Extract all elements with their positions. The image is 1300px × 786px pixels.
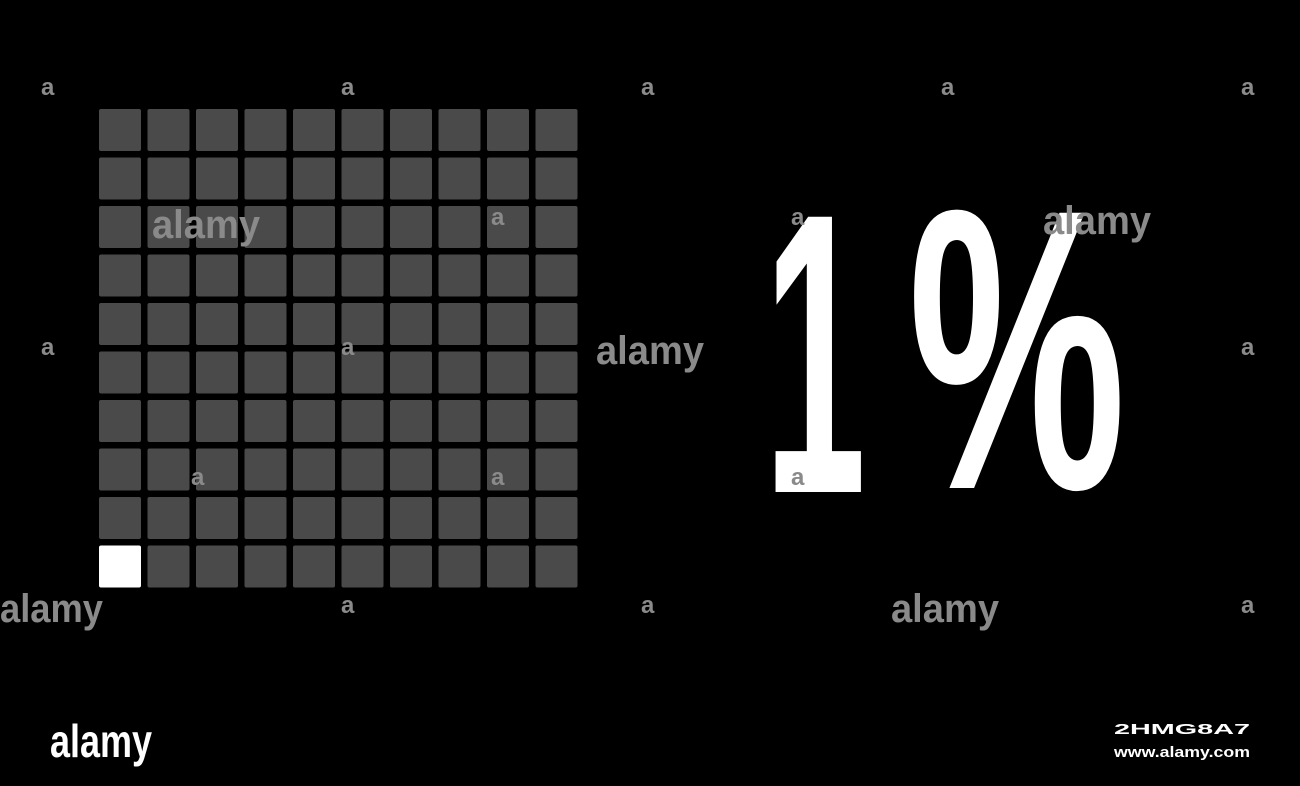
footer image id: www.alamy.com (1113, 744, 1250, 761)
watermarks: alamy (1043, 199, 1152, 243)
small watermark marks: a (641, 592, 655, 619)
small watermark marks: a (341, 592, 355, 619)
small watermark marks (41, 74, 1255, 619)
small watermark marks: a (41, 74, 55, 101)
small watermark marks: a (191, 464, 205, 491)
small watermark marks: a (341, 334, 355, 361)
big percentage label: % (908, 126, 1126, 573)
small watermark marks: a (791, 464, 805, 491)
small watermark marks: a (941, 74, 955, 101)
small watermark marks: a (1241, 74, 1255, 101)
small watermark marks: a (1241, 334, 1255, 361)
watermarks: alamy (0, 587, 104, 631)
watermarks (0, 199, 1152, 631)
footer image id (1113, 721, 1250, 761)
small watermark marks: a (491, 204, 505, 231)
watermarks: alamy (152, 203, 261, 247)
small watermark marks: a (491, 464, 505, 491)
big percentage label (764, 126, 1126, 577)
small watermark marks: a (1241, 592, 1255, 619)
watermarks: alamy (596, 329, 705, 373)
small watermark marks: a (41, 334, 55, 361)
small watermark marks: a (791, 204, 805, 231)
small watermark marks: a (641, 74, 655, 101)
footer logo: alamy (50, 715, 152, 767)
watermarks: alamy (891, 587, 1000, 631)
waffle grid: 100 squares, 1 highlighted (99, 109, 578, 588)
footer image id: 2HMG8A7 (1114, 721, 1250, 738)
big percentage label: 1 (764, 130, 866, 577)
small watermark marks: a (341, 74, 355, 101)
